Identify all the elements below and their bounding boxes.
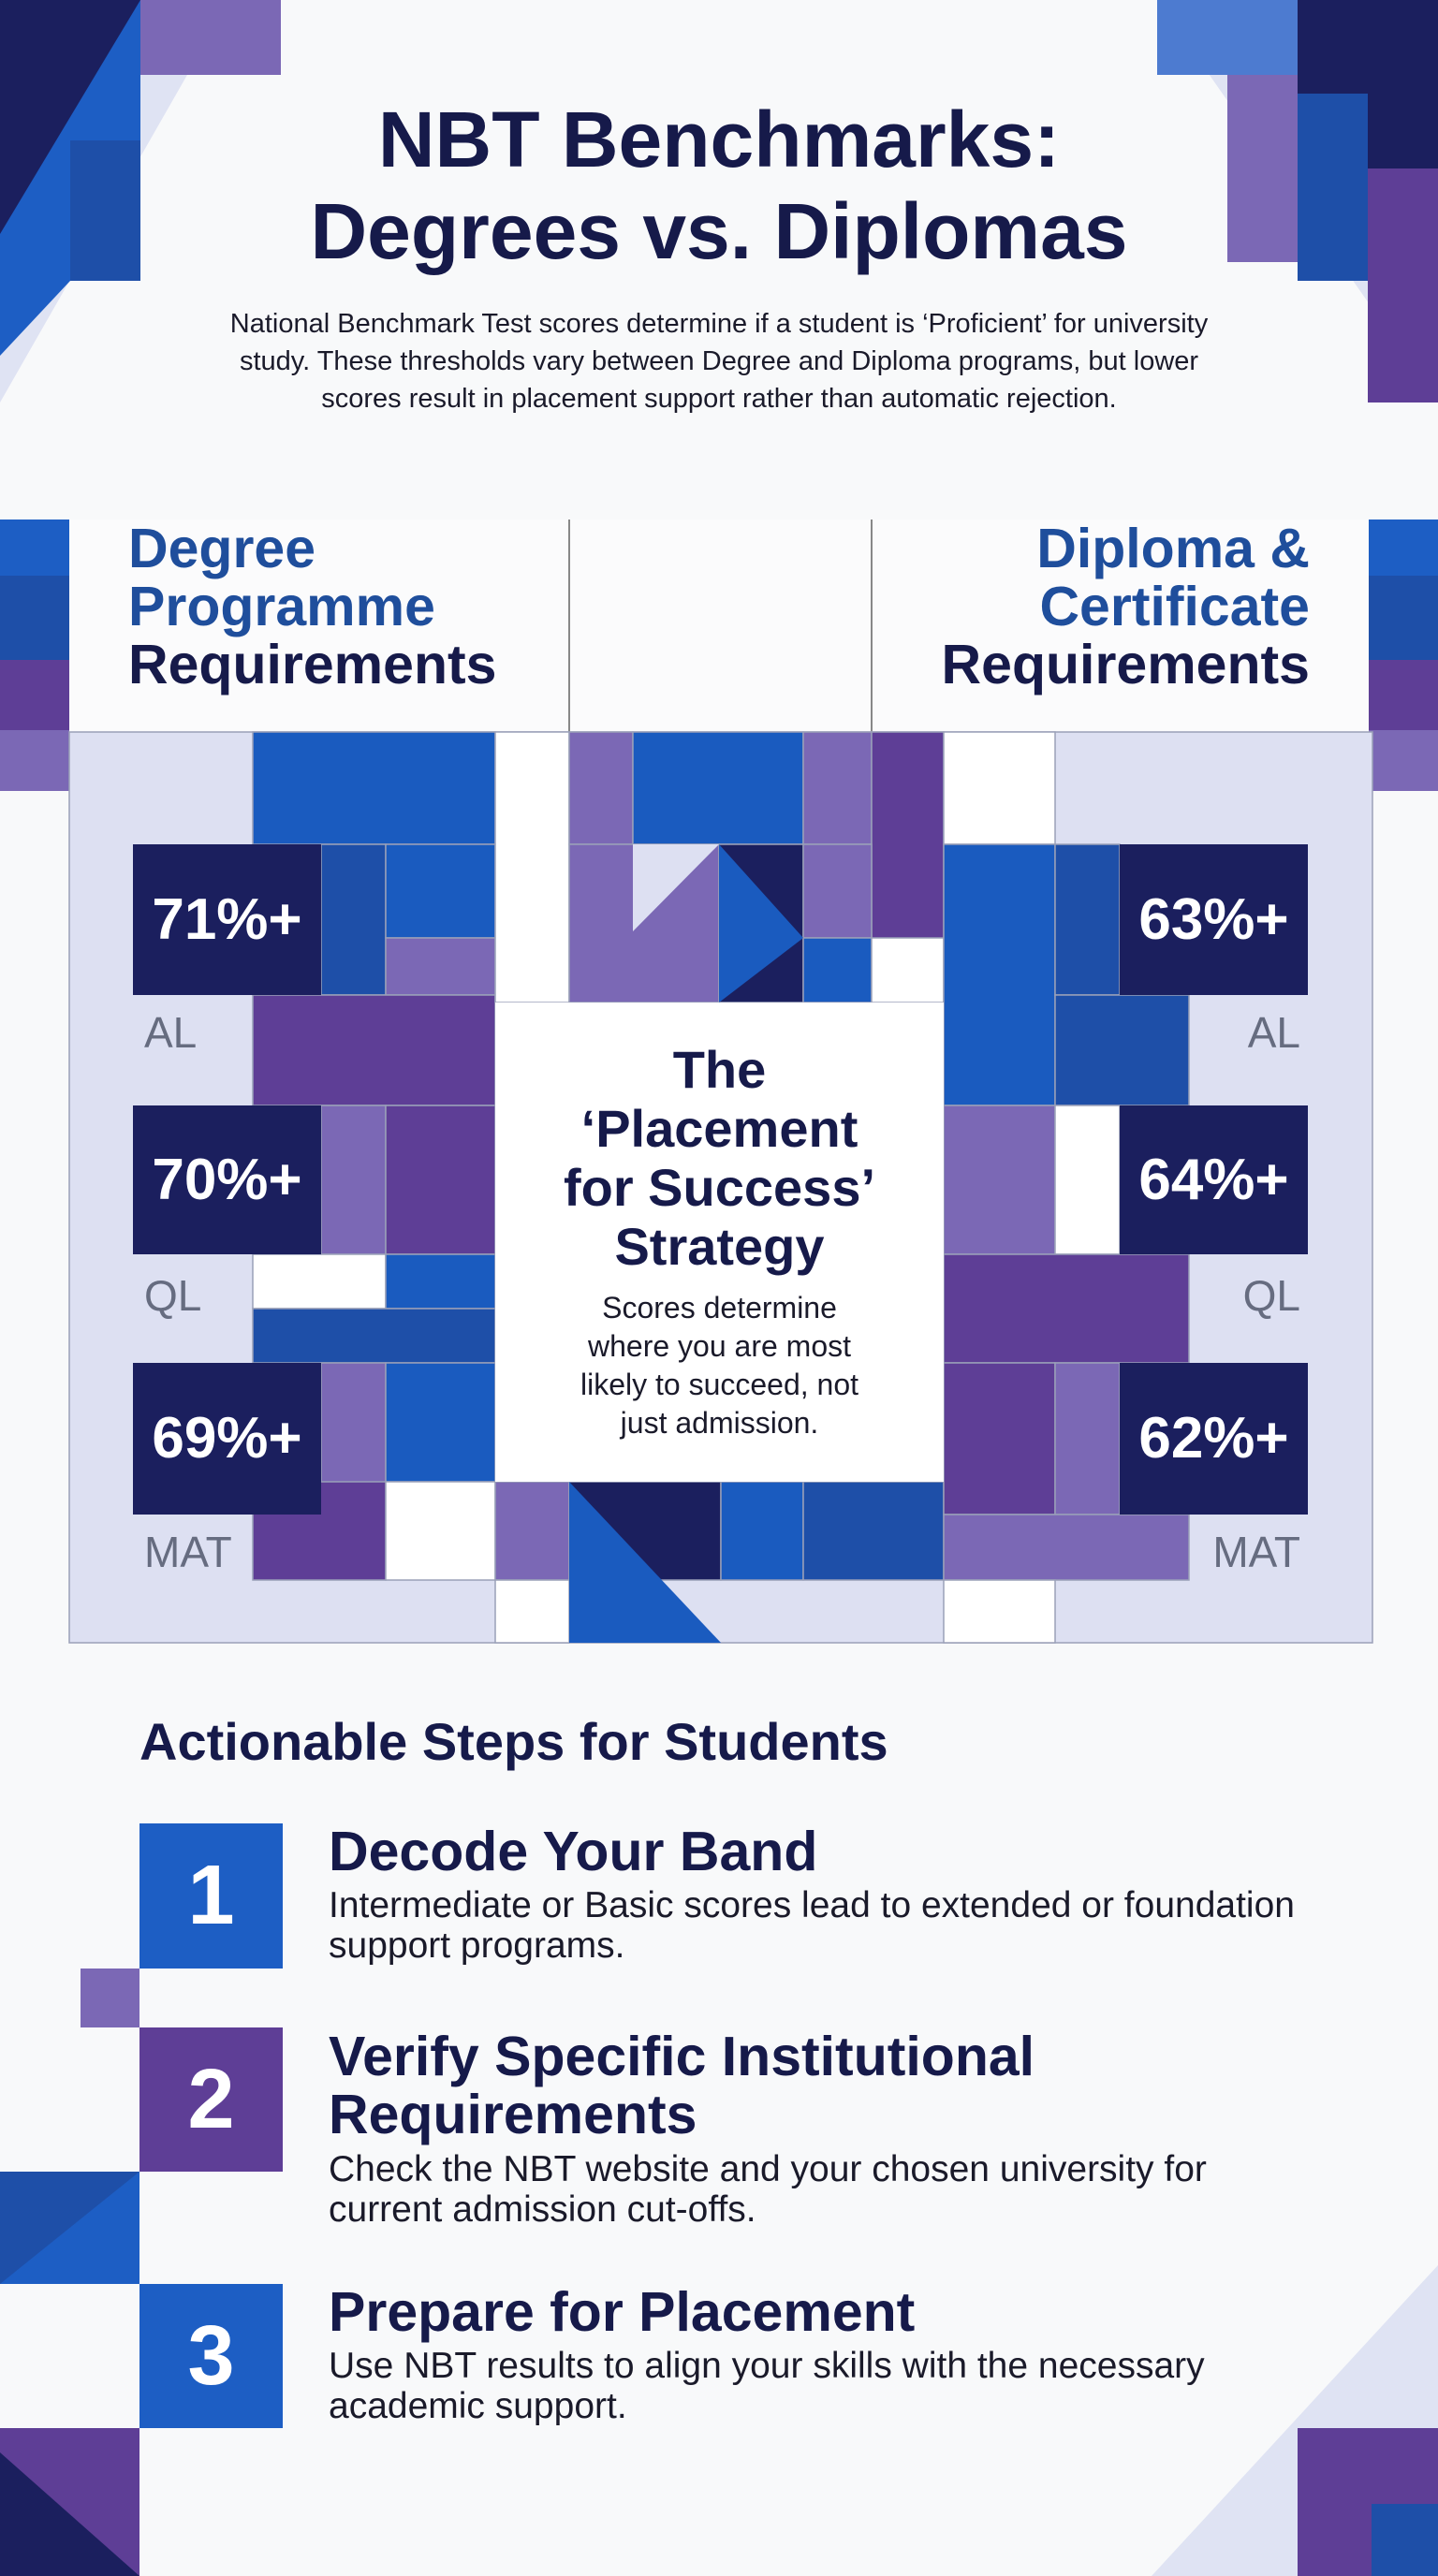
step 1: Intermediate or Basic scores lead to extended or foundation — [329, 1885, 1295, 1925]
center panel: strategy: just admission. — [621, 1406, 818, 1440]
text: AL — [1248, 1008, 1300, 1057]
heading: diploma — [942, 518, 1310, 695]
step 1: support programs. — [329, 1925, 624, 1966]
text: 69%+ — [152, 1406, 302, 1471]
step 2 — [139, 2026, 1207, 2230]
text: 70%+ — [152, 1148, 302, 1212]
center panel: strategy: ‘Placement — [581, 1099, 858, 1158]
step 2: 2 — [187, 2053, 235, 2146]
subtitle: scores result in placement support rather than automatic rejection. — [321, 384, 1117, 414]
step 2: current admission cut-offs. — [329, 2189, 756, 2230]
step 1 — [139, 1821, 1295, 1969]
heading: degree: Degree — [128, 518, 315, 579]
score boxes: diploma — [1120, 844, 1308, 995]
step 2: Verify Specific Institutional — [329, 2026, 1034, 2087]
heading: diploma: Requirements — [942, 634, 1310, 695]
heading: actionable steps: Actionable Steps for Students — [139, 1712, 888, 1771]
heading: degree: Programme — [128, 576, 435, 637]
heading: diploma: Certificate — [1039, 576, 1310, 637]
step 2: Check the NBT website and your chosen university for — [329, 2149, 1207, 2189]
center panel: strategy — [495, 1003, 944, 1482]
title: NBT Benchmarks: — [378, 95, 1060, 183]
step 3: Use NBT results to align your skills with the necessary — [329, 2346, 1205, 2386]
score boxes: degree: 71%+ — [152, 887, 302, 952]
title — [310, 95, 1128, 275]
step 1: Decode Your Band — [329, 1821, 817, 1882]
step 3 — [139, 2281, 1205, 2428]
text: MAT — [144, 1528, 232, 1576]
header panel — [69, 520, 1369, 733]
center panel: strategy: for Success’ — [564, 1158, 875, 1217]
text: QL — [144, 1271, 201, 1320]
heading: degree — [128, 518, 496, 695]
step 3: Prepare for Placement — [329, 2281, 915, 2343]
text: QL — [1243, 1271, 1300, 1320]
text: MAT — [1212, 1528, 1300, 1576]
subtitle: study. These thresholds vary between Degree and Diploma programs, but lower — [240, 346, 1198, 376]
center panel: strategy: Strategy — [614, 1217, 825, 1276]
center panel: strategy: where you are most — [588, 1329, 851, 1363]
text: 62%+ — [1138, 1406, 1289, 1471]
text: 64%+ — [1138, 1148, 1289, 1212]
step 3: academic support. — [329, 2386, 627, 2426]
step 3: 3 — [187, 2309, 235, 2403]
mosaic grid chart — [68, 731, 1373, 1644]
subtitle — [230, 309, 1208, 414]
subtitle: National Benchmark Test scores determine if a student is ‘Proficient’ for university — [230, 309, 1208, 339]
title: Degrees vs. Diplomas — [310, 187, 1128, 275]
heading: degree: Requirements — [128, 634, 496, 695]
heading: diploma: Diploma & — [1036, 518, 1310, 579]
labels: AL — [144, 1008, 197, 1057]
center panel: strategy: Scores determine — [602, 1291, 837, 1325]
score boxes: diploma: 63%+ — [1138, 887, 1289, 952]
center panel: strategy: The — [673, 1040, 766, 1099]
step 1: 1 — [187, 1849, 235, 1942]
center panel: strategy: likely to succeed, not — [580, 1368, 858, 1401]
step 2: Requirements — [329, 2084, 697, 2145]
score boxes: degree — [133, 844, 321, 995]
